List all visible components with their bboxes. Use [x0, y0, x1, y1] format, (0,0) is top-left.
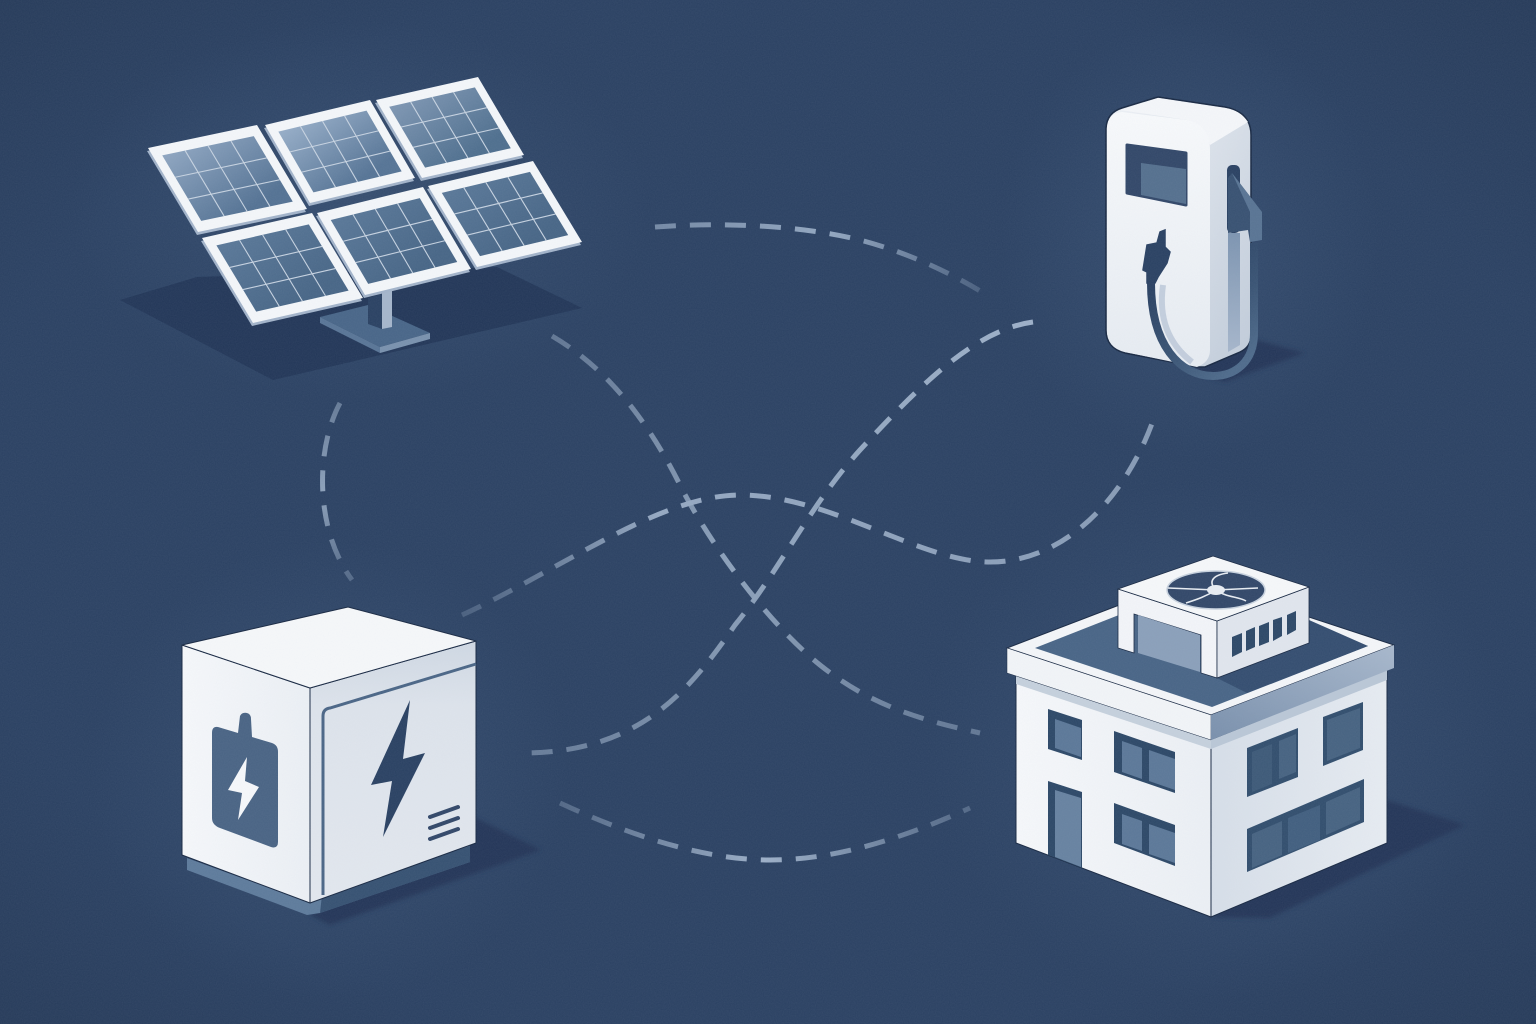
battery door seam: [323, 664, 476, 895]
solar stand: [320, 288, 430, 353]
dashed connection lines: [323, 225, 1155, 860]
solar module bottom right: [427, 161, 582, 270]
battery right face: [310, 641, 476, 903]
window upper middle: [1114, 731, 1175, 793]
HVAC unit: [1118, 556, 1309, 678]
dashed path: solar to building: [552, 336, 980, 733]
window upper left: [1048, 709, 1082, 760]
battery base dark side: [320, 846, 470, 913]
small lightning bolt: [228, 757, 259, 820]
icon: solar panel array: [120, 77, 582, 380]
battery top: [182, 607, 476, 688]
solar module top middle: [264, 100, 415, 206]
solar module top right: [375, 77, 524, 181]
nozzle light side: [1232, 173, 1262, 242]
window right upper one: [1247, 728, 1298, 797]
building shadow: [1211, 800, 1465, 918]
large lightning bolt: [371, 700, 425, 837]
cornice left face: [1007, 648, 1211, 740]
dashed path: battery to charger: [462, 415, 1155, 615]
HVAC fan: [1167, 571, 1265, 609]
roof inset: [1035, 587, 1368, 707]
solar module bottom left: [201, 213, 363, 326]
charger shadow: [1190, 338, 1305, 382]
dashed path: solar to charger: [655, 225, 990, 297]
charger cable: [1151, 243, 1254, 376]
battery shadow: [310, 815, 541, 925]
side light cable channel: [1228, 233, 1240, 352]
left wall windows and door: [1048, 709, 1175, 868]
right wall windows: [1247, 702, 1364, 872]
HVAC right face: [1217, 587, 1309, 678]
roof slab top: [1007, 578, 1394, 715]
building door: [1048, 781, 1082, 868]
charger front face: [1107, 112, 1210, 367]
solar module top left: [147, 125, 307, 235]
cable shadow on charger: [1162, 285, 1192, 362]
HVAC left face: [1118, 589, 1217, 678]
charger screen inset: [1141, 163, 1186, 204]
left cornice shadow band: [1016, 675, 1211, 749]
dashed path: charger to battery: [525, 322, 1033, 753]
charger screen: [1127, 145, 1186, 205]
HVAC vents: [1232, 611, 1296, 657]
battery base: [187, 845, 470, 915]
nozzle holster slot: [1227, 165, 1240, 233]
charger body side: [1106, 97, 1251, 367]
battery icon body: [212, 713, 278, 847]
battery vents: [430, 807, 458, 839]
charger nozzle: [1228, 173, 1262, 242]
dashed path: battery to building: [560, 803, 970, 860]
window right upper two: [1323, 702, 1363, 766]
icon: battery storage unit: [182, 607, 541, 925]
window right lower wide: [1247, 779, 1364, 872]
HVAC top: [1118, 556, 1309, 621]
charger plug: [1143, 230, 1170, 283]
roof shadow: [1217, 620, 1368, 693]
icon: EV charger: [1106, 97, 1305, 382]
dashed path: solar to battery: [323, 403, 352, 580]
building right wall: [1211, 668, 1387, 917]
window lower middle: [1114, 803, 1175, 866]
right cornice shadow band: [1211, 670, 1387, 749]
battery left face: [182, 645, 310, 903]
solar ground shadow: [120, 267, 582, 380]
HVAC recess: [1138, 615, 1200, 672]
building left wall: [1016, 672, 1211, 917]
charger top: [1120, 98, 1248, 145]
cornice right face: [1211, 645, 1394, 740]
icon: building with rooftop HVAC: [1007, 556, 1465, 918]
solar module bottom middle: [316, 187, 471, 298]
